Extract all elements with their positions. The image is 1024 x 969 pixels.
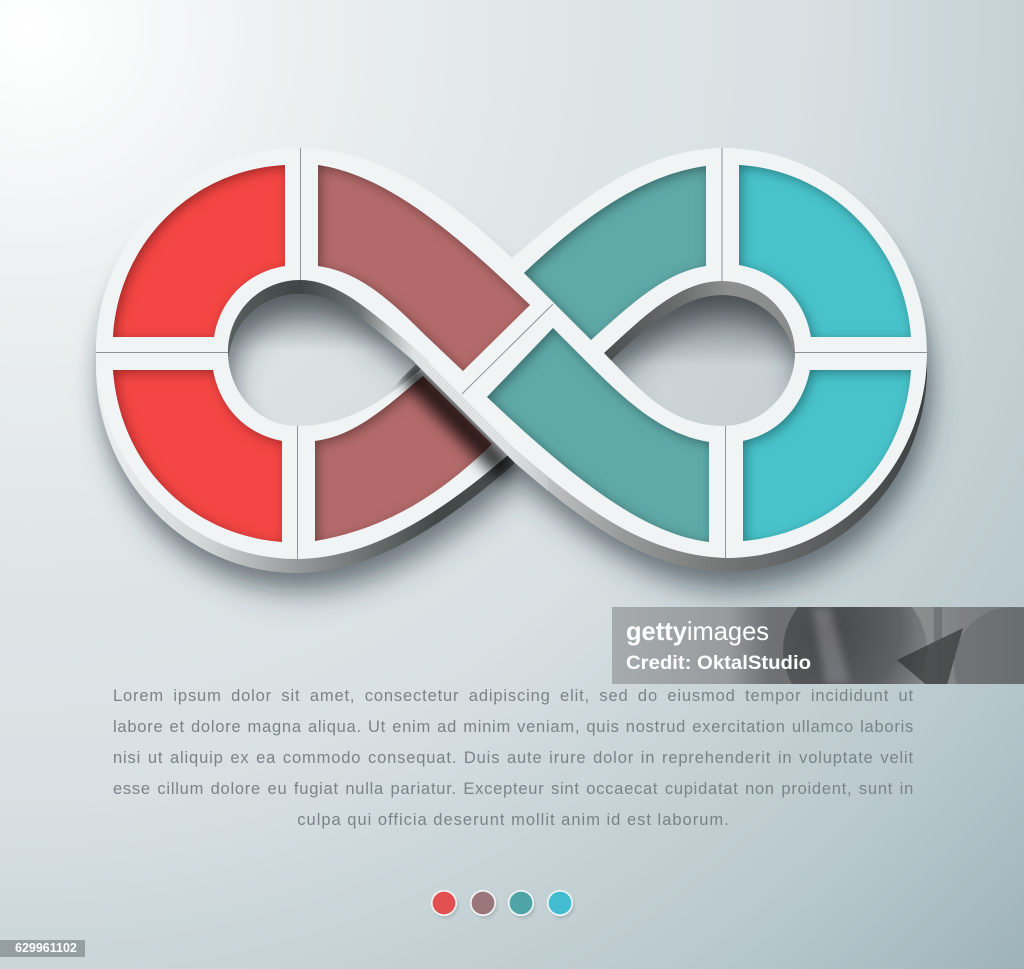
panel: cyan lower [743, 370, 911, 541]
crossing band side wall [415, 349, 548, 491]
frame seams [96, 148, 927, 559]
extruded side walls [96, 149, 927, 573]
panel: teal upper [524, 166, 706, 340]
panel: teal lower [487, 328, 709, 542]
colour legend dots [432, 891, 576, 920]
panel: red upper [113, 165, 285, 337]
body text: Lorem ipsum dolor sit amet, consectetur adipiscing elit, sed do eiusmod tempor incididunt ut [113, 687, 914, 705]
body text [113, 687, 914, 829]
panel: cyan upper [739, 165, 911, 337]
crossing shadow on the lower ribbon [400, 360, 515, 480]
right hole inner wall [604, 281, 795, 360]
panel: red lower [113, 370, 282, 542]
panel: brown upper [318, 165, 530, 371]
dot: teal [508, 891, 538, 920]
right hole floor shading [604, 281, 795, 426]
body text: nisi ut aliquip ex ea commodo consequat. Duis aute irure dolor in reprehenderit in voluptate velit [113, 749, 914, 767]
body text: labore et dolore magna aliqua. Ut enim ad minim veniam, quis nostrud exercitation ullamco laboris [113, 718, 914, 736]
dot: brown [470, 891, 500, 920]
left hole inner wall [228, 280, 430, 367]
left hole floor shading [228, 280, 430, 426]
dot: red [432, 891, 460, 920]
image id tag [0, 940, 85, 957]
watermark panel [612, 607, 1024, 684]
body text: esse cillum dolore eu fugiat nulla pariatur. Excepteur sint occaecat cupidatat non proident, sunt in [113, 780, 914, 798]
panel: brown lower [315, 376, 492, 541]
body text: culpa qui officia deserunt mollit anim id est laborum. [297, 811, 730, 829]
dot: cyan [548, 891, 576, 920]
watermark brand: gettyimages [626, 616, 769, 646]
infinity diagram [82, 148, 1024, 919]
image id tag: 629961102 [15, 941, 77, 955]
white infinity frame [96, 148, 927, 559]
watermark credit: Credit: OktalStudio [626, 653, 811, 674]
wide drop shadow under the infinity shape [102, 186, 933, 597]
close drop shadow under the infinity shape [99, 172, 930, 583]
